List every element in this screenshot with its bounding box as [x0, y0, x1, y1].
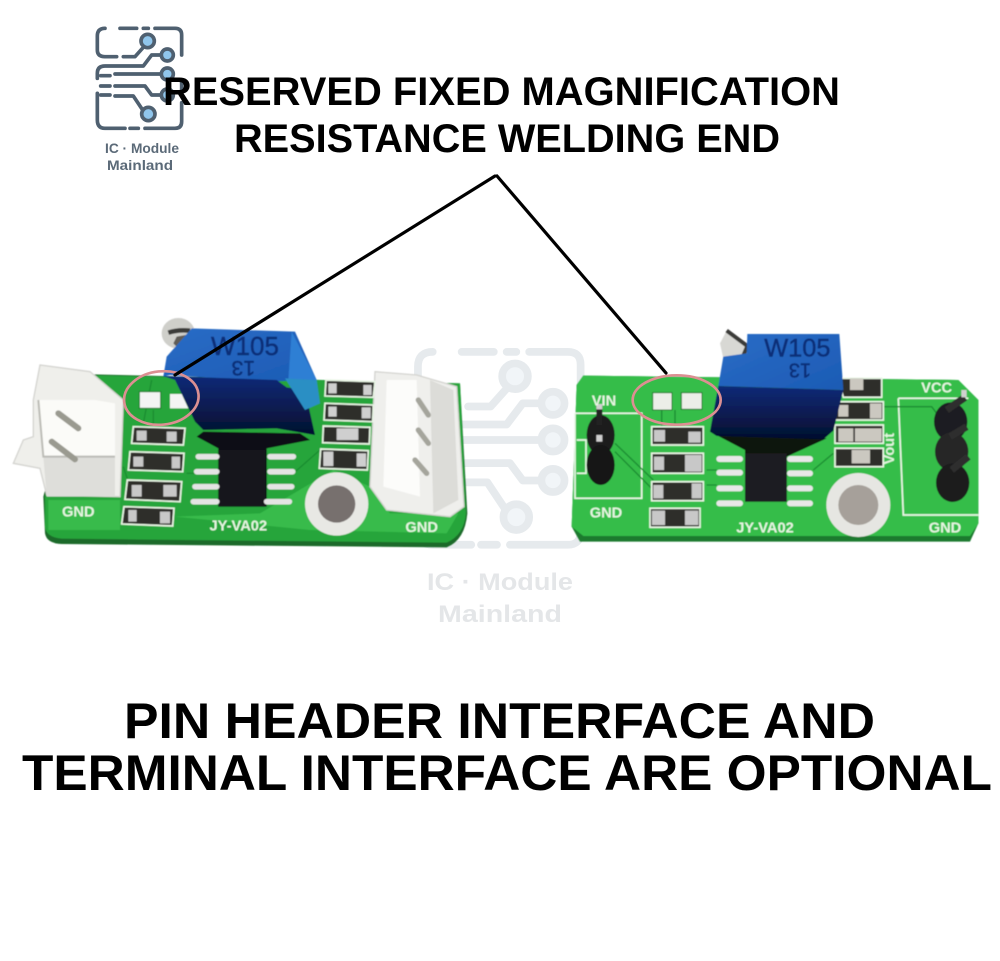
connector: right white terminal: [370, 372, 464, 517]
ic chip: [193, 432, 310, 507]
labels on board: VIN: [592, 394, 616, 410]
pcb: left board: [43, 374, 467, 547]
potentiometer: 13: [789, 358, 811, 380]
smd components left column: [122, 427, 185, 526]
title: reserved fixed magnification resistance welding end: [163, 70, 840, 161]
solder pads: [653, 393, 702, 410]
highlight circle: left pads: [121, 368, 201, 428]
logo: IC Module Mainland: IC · Module: [105, 140, 179, 156]
watermark: center logo: Mainland: [438, 601, 562, 628]
potentiometer: [710, 331, 843, 439]
watermark: center logo: IC · Module: [427, 569, 573, 596]
solder pads: [139, 392, 188, 408]
potentiometer: W105: [764, 335, 830, 363]
caption: pin header interface and terminal interface are optional: PIN HEADER INTERFACE AND: [124, 693, 875, 749]
board outlines and tracks: [575, 398, 978, 515]
potentiometer: W105: [211, 331, 279, 361]
connector: left white terminal: [13, 365, 123, 497]
watermark: center logo: [418, 352, 581, 628]
smd components left column: [650, 427, 703, 527]
pcb: right board: [572, 376, 978, 542]
title: reserved fixed magnification resistance welding end: RESISTANCE WELDING END: [234, 117, 780, 161]
leader lines from title to pads: [175, 176, 666, 375]
labels on board: VCC: [921, 381, 953, 397]
labels on board: GND: [590, 506, 622, 522]
labels on board: [590, 381, 961, 537]
labels on board: JY-VA02: [210, 519, 267, 535]
labels on board: GND: [929, 521, 961, 537]
title: reserved fixed magnification resistance welding end: RESERVED FIXED MAGNIFICATION: [163, 70, 840, 114]
labels on board: [62, 505, 438, 536]
smd components right column: [835, 378, 883, 467]
labels on board: GND: [62, 505, 95, 521]
potentiometer: 13: [231, 356, 255, 380]
board: pin header module: [572, 331, 978, 542]
labels on board: Vout: [882, 433, 898, 464]
highlight circle: right pads: [633, 375, 721, 425]
mounting hole: [826, 473, 890, 537]
caption: pin header interface and terminal interface are optional: TERMINAL INTERFACE ARE OPTIONAL: [22, 745, 992, 801]
potentiometer: [162, 318, 320, 435]
mounting hole: [305, 472, 368, 536]
board: terminal interface module: [13, 318, 467, 547]
header: right pins: [934, 390, 969, 502]
caption: pin header interface and terminal interface are optional: [22, 693, 992, 801]
logo: IC Module Mainland: [97, 28, 182, 173]
logo: IC Module Mainland: Mainland: [107, 157, 173, 173]
labels on board: JY-VA02: [736, 520, 794, 536]
header: left pins: [587, 404, 615, 485]
labels on board: GND: [405, 520, 438, 536]
smd components right column: [319, 380, 375, 470]
ic chip: [710, 432, 827, 503]
